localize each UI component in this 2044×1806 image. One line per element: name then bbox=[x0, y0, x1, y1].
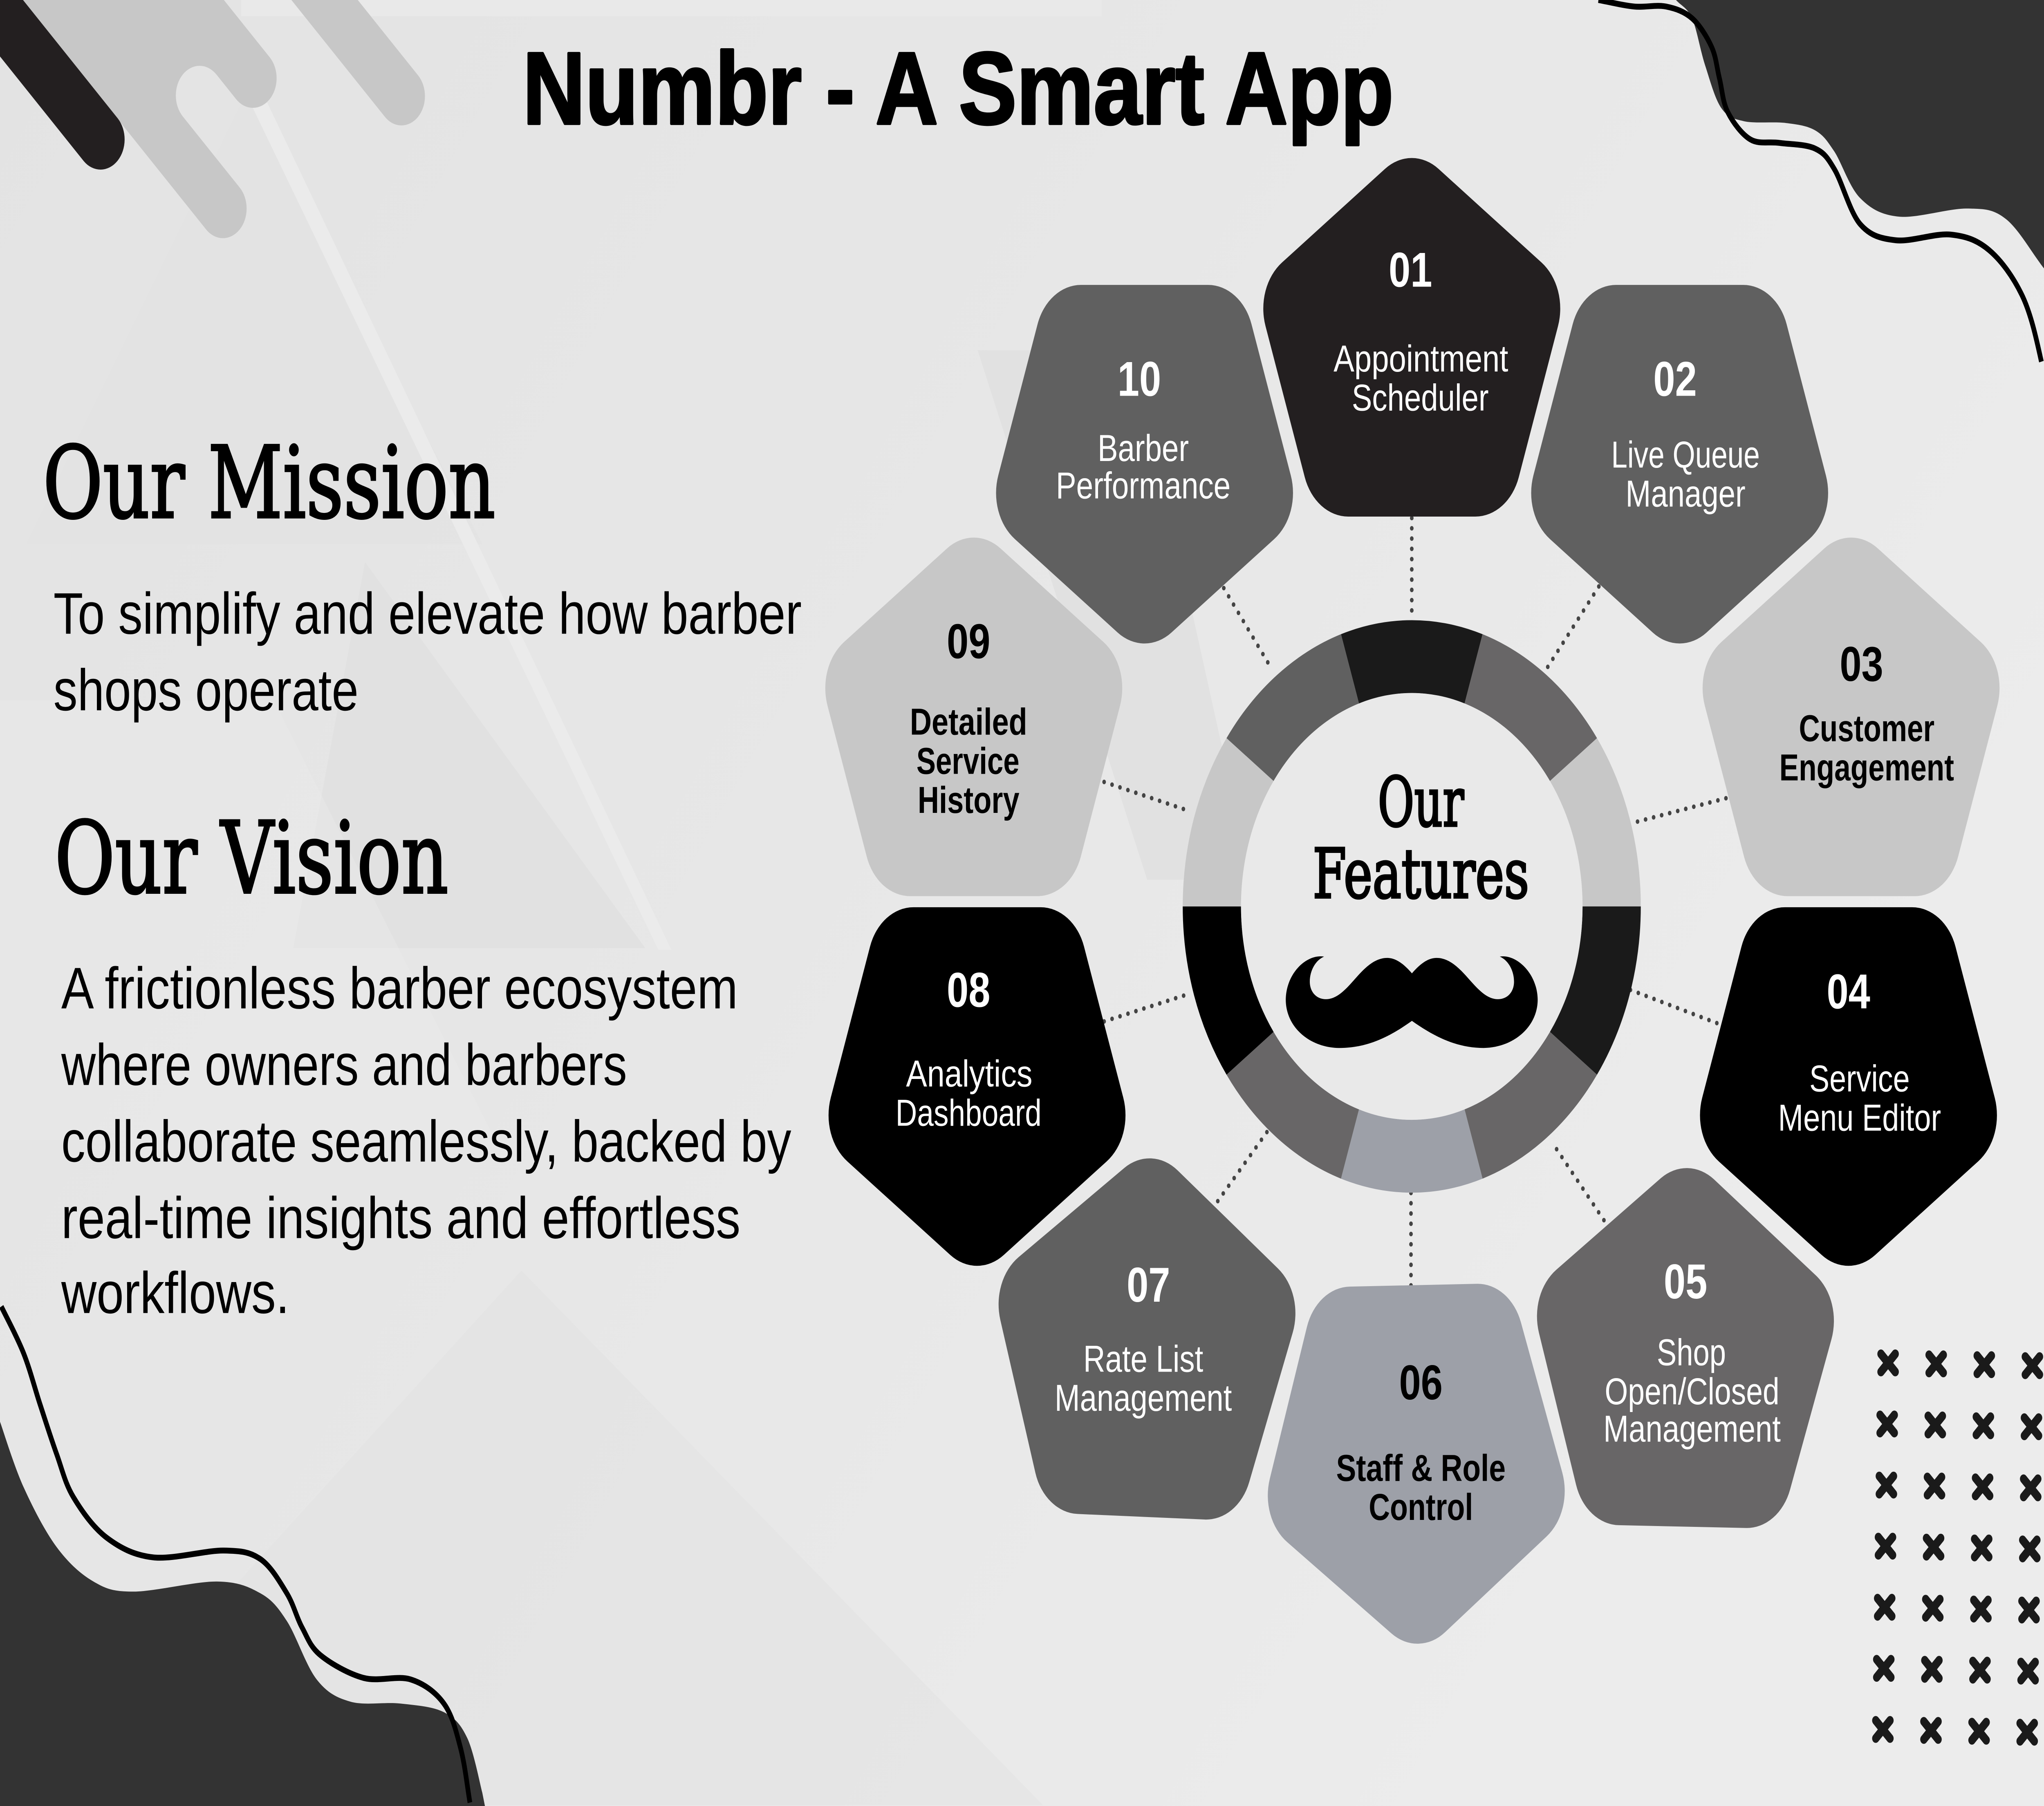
text block: vision statement: collaborate seamlessly, backed by bbox=[61, 1108, 791, 1174]
feature 03: customer engagement bbox=[1748, 595, 1954, 839]
decorative bottom-left wave bbox=[0, 1307, 485, 1806]
heading: our vision: Our Vision bbox=[55, 801, 448, 916]
text block: mission statement: To simplify and elevate how barber bbox=[54, 580, 802, 647]
feature 10: barber performance bbox=[1042, 342, 1247, 586]
feature 02: live queue manager: 02 bbox=[1653, 351, 1697, 406]
feature 09: detailed service history: History bbox=[918, 779, 1020, 821]
feature 09: detailed service history: Detailed bbox=[910, 701, 1027, 743]
feature 08: analytics dashboard: Analytics bbox=[906, 1053, 1033, 1095]
feature 09: detailed service history: 09 bbox=[947, 614, 990, 669]
feature 06: staff and role control: Control bbox=[1369, 1486, 1473, 1528]
feature 10: barber performance: Performance bbox=[1056, 465, 1230, 507]
text block: vision statement: workflows. bbox=[61, 1260, 289, 1326]
feature 02: live queue manager bbox=[1577, 342, 1782, 586]
decorative top-right wave bbox=[1598, 0, 2044, 362]
feature 04: service menu editor bbox=[1746, 964, 1951, 1209]
feature 05: shop open/closed management: Shop bbox=[1657, 1332, 1726, 1373]
center heading: our features bbox=[1313, 762, 1529, 914]
feature 06: staff and role control bbox=[1311, 1340, 1520, 1589]
decorative cross pattern bbox=[1876, 1354, 2040, 1741]
feature 05: shop open/closed management: 05 bbox=[1664, 1254, 1707, 1309]
dotted connectors bbox=[1104, 518, 1726, 1285]
feature 07: rate list management bbox=[1040, 1211, 1253, 1464]
feature 01: appointment scheduler: Scheduler bbox=[1352, 377, 1489, 418]
text block: mission statement: shops operate bbox=[54, 657, 359, 723]
heading: our mission: Our Mission bbox=[43, 425, 495, 541]
feature 06: staff and role control: 06 bbox=[1399, 1355, 1443, 1410]
feature 07: rate list management: 07 bbox=[1127, 1258, 1170, 1312]
feature 08: analytics dashboard: Dashboard bbox=[896, 1092, 1042, 1134]
feature 02: live queue manager: Manager bbox=[1625, 473, 1746, 515]
feature 05: shop open/closed management: Management bbox=[1603, 1408, 1781, 1450]
feature ring bbox=[1183, 620, 1641, 1193]
decorative top-left rounded bars bbox=[0, 0, 425, 238]
feature 10: barber performance: 10 bbox=[1118, 351, 1161, 406]
text block: vision statement: where owners and barbers bbox=[61, 1032, 627, 1098]
feature 01: appointment scheduler: 01 bbox=[1389, 242, 1432, 297]
feature 03: customer engagement: Engagement bbox=[1780, 747, 1954, 788]
feature 07: rate list management: Rate List bbox=[1083, 1338, 1203, 1380]
feature 06: staff and role control: Staff & Role bbox=[1336, 1447, 1506, 1489]
feature 08: analytics dashboard bbox=[874, 962, 1080, 1209]
center heading: our features: Features bbox=[1313, 834, 1529, 914]
feature 08: analytics dashboard: 08 bbox=[947, 962, 990, 1017]
feature 05: shop open/closed management bbox=[1580, 1223, 1790, 1472]
feature 03: customer engagement: 03 bbox=[1840, 637, 1883, 692]
feature 04: service menu editor: 04 bbox=[1827, 964, 1870, 1019]
feature 02: live queue manager: Live Queue bbox=[1611, 434, 1760, 476]
feature 05: shop open/closed management: Open/Closed bbox=[1605, 1370, 1780, 1412]
feature 04: service menu editor: Service bbox=[1809, 1058, 1910, 1100]
feature 04: service menu editor: Menu Editor bbox=[1778, 1097, 1941, 1139]
title: Numbr - A Smart App bbox=[523, 31, 1394, 146]
feature 07: rate list management: Management bbox=[1055, 1377, 1232, 1419]
feature 01: appointment scheduler: Appointment bbox=[1334, 338, 1508, 380]
text block: vision statement bbox=[61, 955, 791, 1326]
feature 10: barber performance: Barber bbox=[1098, 427, 1189, 469]
feature 09: detailed service history: Service bbox=[917, 740, 1020, 782]
text block: vision statement: real-time insights and effortless bbox=[61, 1185, 740, 1251]
feature 01: appointment scheduler bbox=[1309, 215, 1515, 459]
feature 09: detailed service history bbox=[871, 595, 1077, 839]
text block: vision statement: A frictionless barber ecosystem bbox=[61, 955, 738, 1021]
text block: mission statement bbox=[54, 580, 802, 723]
icon: mustache bbox=[1286, 956, 1537, 1048]
center heading: our features: Our bbox=[1378, 762, 1464, 842]
feature 03: customer engagement: Customer bbox=[1799, 707, 1934, 750]
